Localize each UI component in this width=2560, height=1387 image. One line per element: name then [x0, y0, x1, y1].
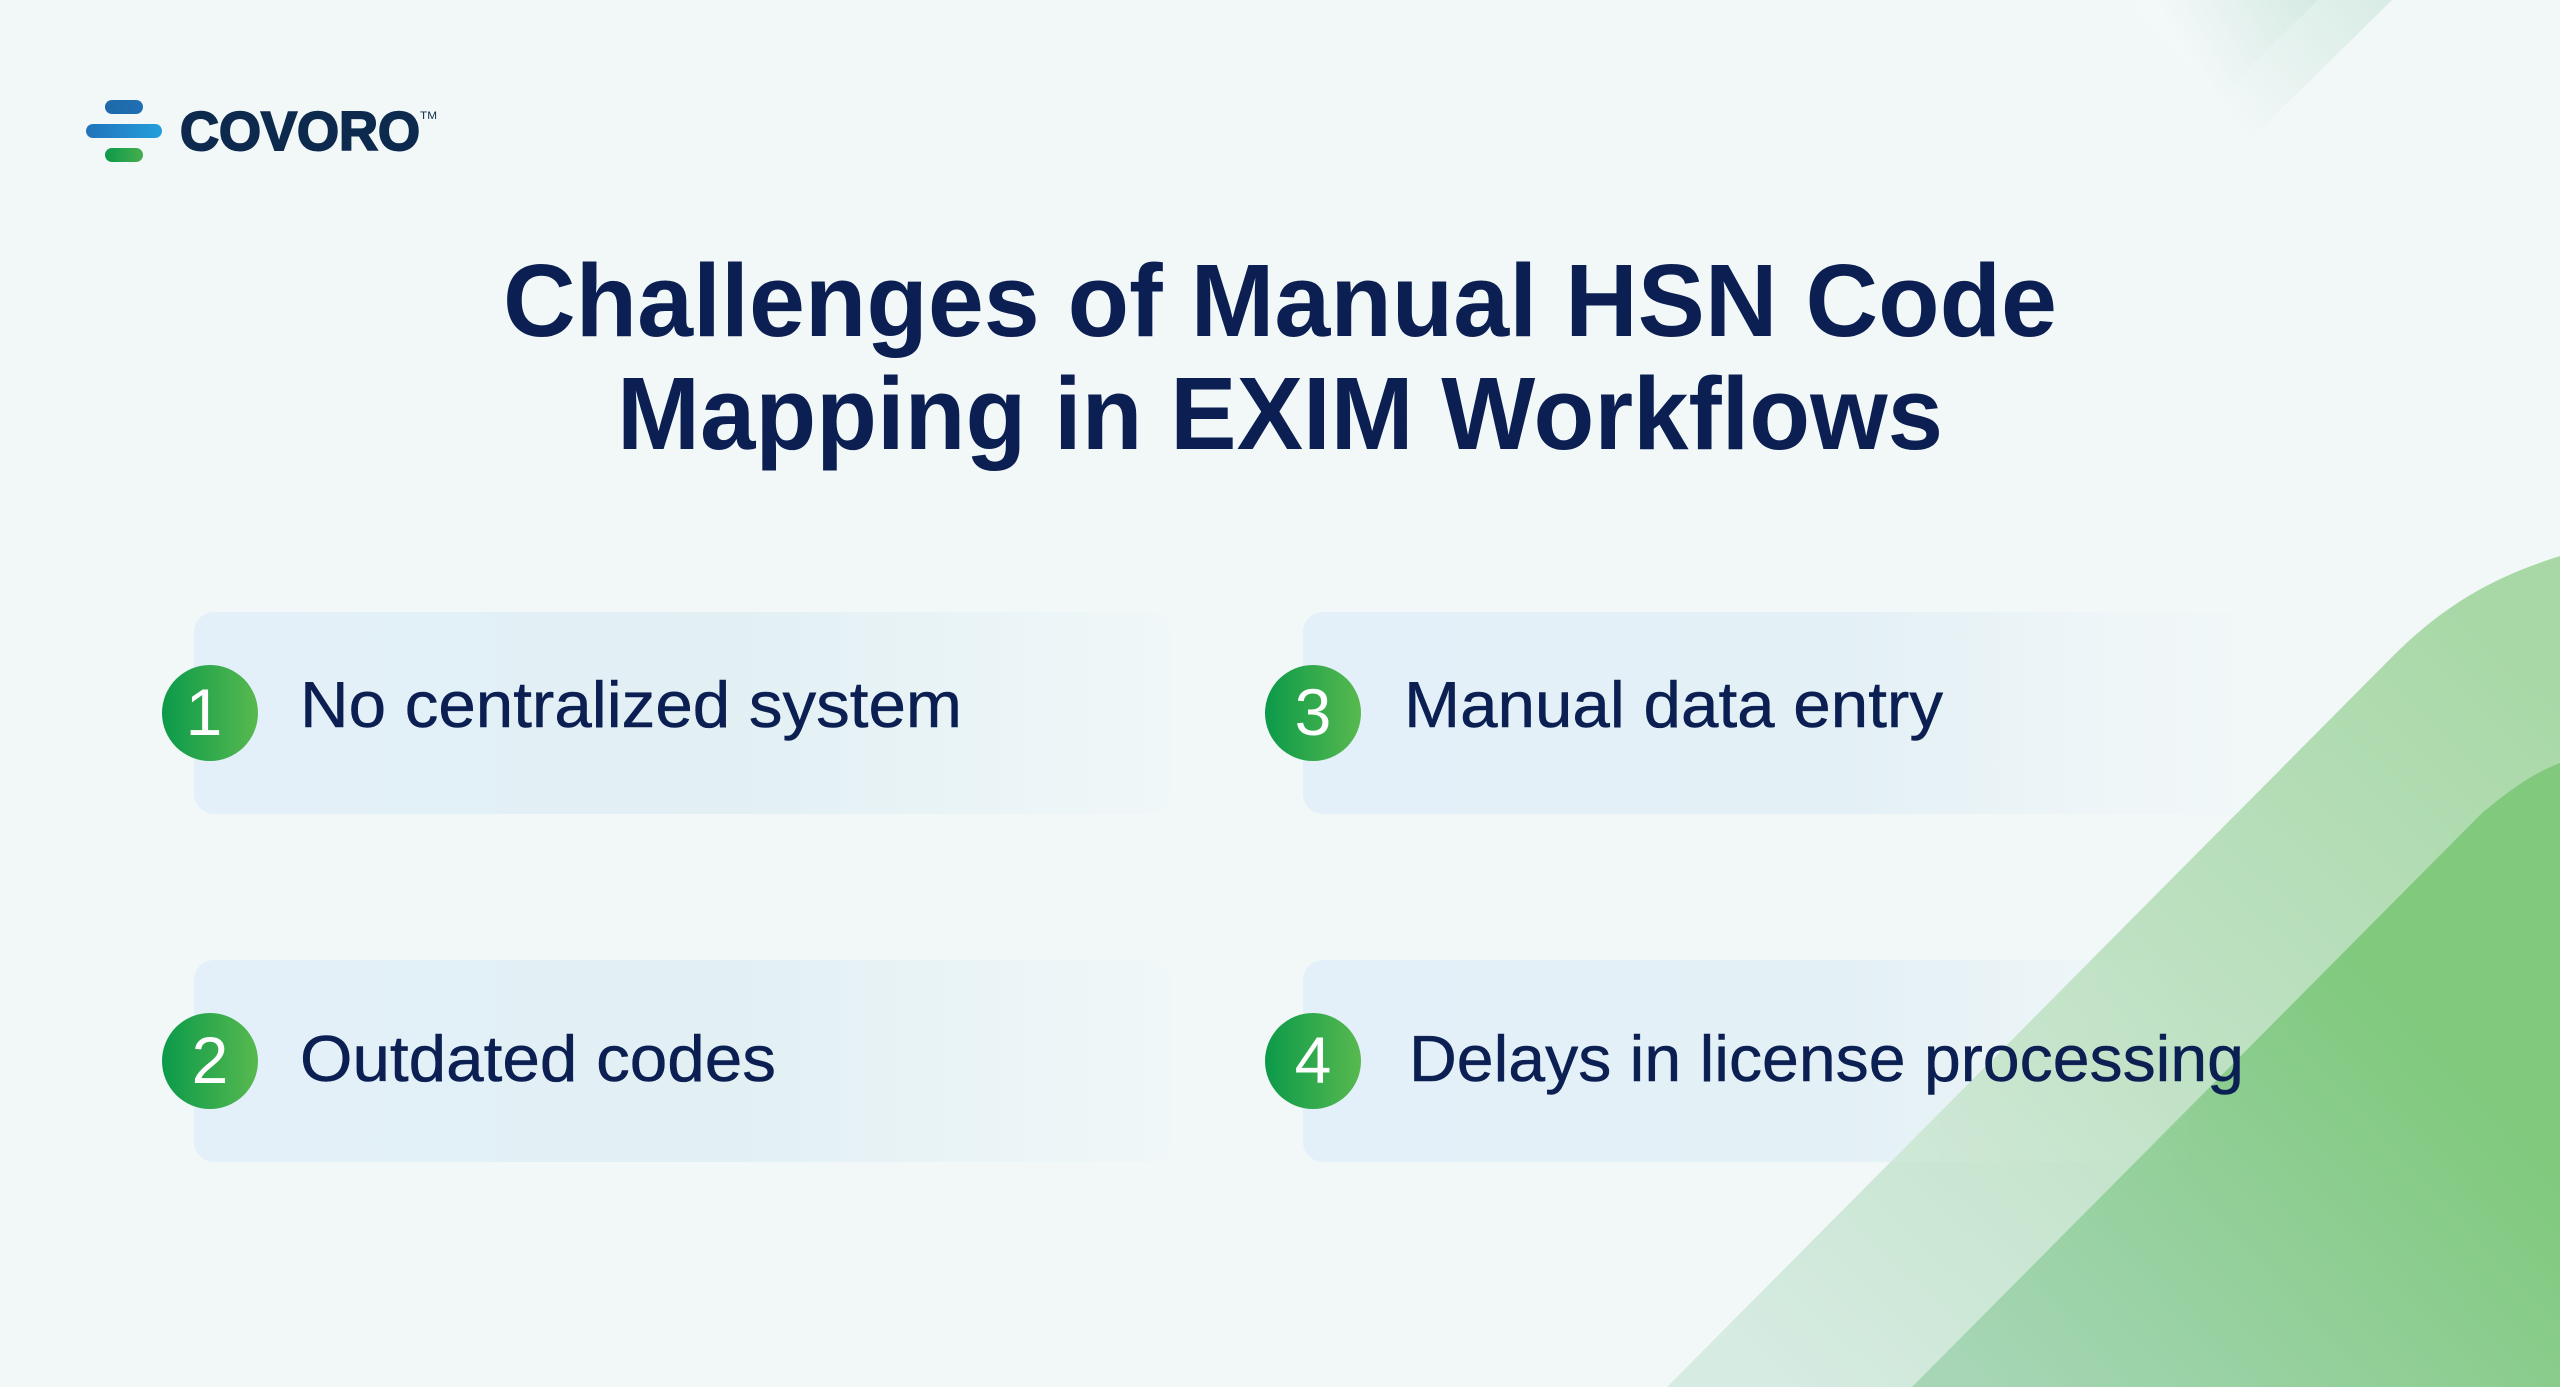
item text: Outdated codes: [300, 1022, 776, 1095]
card background: [1303, 612, 2280, 814]
number badge 2: [162, 1013, 258, 1109]
panel: item 2: [162, 960, 1171, 1162]
logo: Covoro: [86, 100, 437, 162]
logo wordmark: COVORO: [180, 100, 420, 162]
number badge 2: 2: [192, 1023, 228, 1097]
number badge 4: [1265, 1013, 1361, 1109]
decorative bottom right green shapes: [1667, 556, 2560, 1387]
number badge 1: [162, 665, 258, 761]
logo icon: three bars: [86, 100, 162, 162]
number badge 4: 4: [1295, 1023, 1331, 1097]
number badge 3: 3: [1295, 675, 1331, 749]
title: Mapping in EXIM Workflows: [617, 356, 1943, 471]
panel: item 3: [1265, 612, 2280, 814]
card tint over the green shape: [1890, 960, 2280, 1162]
trademark mark: TM: [420, 110, 437, 122]
decorative top right shapes: [2128, 0, 2392, 143]
card background: [194, 960, 1171, 1162]
number badge 1: 1: [186, 675, 222, 749]
title: Challenges of Manual HSN Code: [503, 243, 2057, 358]
card background: [194, 612, 1171, 814]
item text: Delays in license processing: [1409, 1022, 2244, 1095]
number badge 3: [1265, 665, 1361, 761]
panel: item 4: [1265, 960, 2280, 1162]
panel: item 1: [162, 612, 1171, 814]
item text: Manual data entry: [1404, 668, 1944, 741]
card background: [1303, 960, 2091, 1162]
title: [503, 243, 2057, 471]
item text: No centralized system: [300, 668, 962, 741]
